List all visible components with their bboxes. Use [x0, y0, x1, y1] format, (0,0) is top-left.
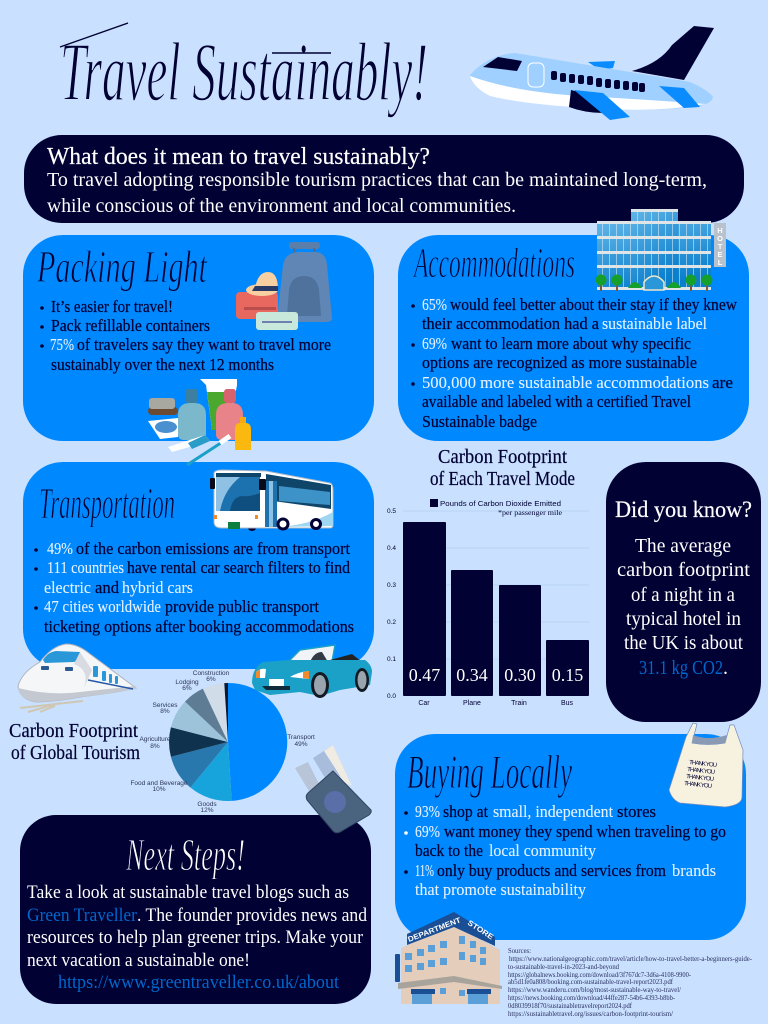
- pie labels: 10%: [152, 786, 166, 793]
- did you know fact: typical hotel in: [626, 608, 741, 630]
- sources: https://globalnews.booking.com/download/3f767dc7-3d6a-4108-9900-: [508, 970, 691, 979]
- pie labels: Transport: [287, 734, 315, 741]
- x axis labels: Car: [418, 700, 430, 707]
- bullet list: It’s easier for travel!: [51, 297, 173, 316]
- icon: shopping bag: THANK YOU: [686, 774, 714, 783]
- bullet list: Sustainable badge: [422, 412, 537, 431]
- bullet list: [40, 297, 331, 374]
- definition text: while conscious of the environment and local communities.: [47, 195, 516, 217]
- chart title: travel mode: [430, 447, 575, 490]
- bullet list: Pack refillable containers: [51, 316, 210, 335]
- definition text: [47, 169, 707, 217]
- slice: construction: [203, 683, 228, 742]
- bullet list: of travelers say they want to travel more: [77, 335, 331, 354]
- x axis labels: Train: [511, 700, 527, 707]
- pie labels: Agriculture: [139, 736, 171, 743]
- bullet list: small, independent: [493, 802, 613, 821]
- heading: accommodations: Accommodations: [412, 241, 575, 287]
- heading: next steps: Next Steps!: [125, 829, 245, 880]
- bullet list: 49%: [47, 539, 73, 558]
- bar chart: 0.5: [387, 508, 396, 515]
- icon: hotel: O: [717, 234, 723, 243]
- bullet list: only buy products and services from: [437, 861, 666, 880]
- definition text: To travel adopting responsible tourism practices that can be maintained long-term,: [47, 169, 707, 191]
- bullet list: shop at: [443, 802, 488, 821]
- bullet list: [411, 295, 738, 431]
- sources: to-sustainable-travel-in-2023-and-beyond: [508, 962, 619, 971]
- bullet list: 47 cities worldwide: [44, 597, 161, 616]
- did you know fact: of a night in a: [631, 584, 735, 606]
- bullet list: 111 countries: [47, 558, 124, 577]
- sources: https://www.wanderu.com/blog/most-sustainable-way-to-travel/: [508, 985, 682, 994]
- bullet list: would feel better about their stay if they knew: [450, 295, 738, 314]
- heading: packing light: Packing Light: [36, 241, 208, 292]
- bar: train: [499, 585, 541, 696]
- slice: transport: [228, 683, 287, 801]
- pie labels: Lodging: [175, 679, 199, 686]
- bullet list: of the carbon emissions are from transport: [76, 539, 350, 558]
- pie labels: 6%: [206, 676, 216, 683]
- bullet list: brands: [672, 861, 716, 880]
- bar chart: 0.4: [387, 545, 396, 552]
- did you know fact: The average: [635, 535, 731, 557]
- did you know heading: Did you know?: [615, 497, 752, 522]
- next steps text: [27, 882, 367, 971]
- icon: convertible car: [252, 645, 372, 698]
- bullet list: want money they spend when traveling to go: [444, 822, 726, 841]
- next steps text: resources to help plan greener trips. Make your: [27, 927, 364, 948]
- next steps text: Take a look at sustainable travel blogs such as: [27, 882, 349, 903]
- icon: bullet train: [18, 644, 136, 712]
- sources: https://sustainabletravel.org/issues/carbon-footprint-tourism/: [508, 1009, 674, 1018]
- bullet list: options are recognized as more sustainable: [422, 353, 697, 372]
- icon: luggage: [236, 242, 332, 330]
- bullet list: stores: [617, 802, 656, 821]
- chart title: global tourism: [9, 721, 140, 764]
- bar: bus: [546, 640, 589, 696]
- title: Travel Sustainably!: [60, 26, 428, 119]
- icon: toiletries: [148, 379, 251, 465]
- bar chart: 0.1: [387, 656, 396, 663]
- panel: packing light: [23, 235, 374, 441]
- did you know fact: the UK is about: [624, 632, 743, 654]
- did you know fact: .: [723, 657, 728, 679]
- x axis labels: [418, 700, 574, 707]
- legend: *per passenger mile: [498, 508, 563, 517]
- icon: hotel: T: [718, 242, 723, 251]
- title: [60, 23, 428, 119]
- slice: services: [171, 702, 228, 742]
- did you know fact: carbon footprint: [617, 559, 750, 581]
- chart title: global tourism: of Global Tourism: [11, 743, 140, 764]
- pie labels: 12%: [200, 807, 214, 814]
- slice: goods: [190, 742, 232, 801]
- bar: plane: 0.34: [456, 665, 488, 685]
- chart title: travel mode: Carbon Footprint: [438, 447, 568, 468]
- bar: car: 0.47: [409, 665, 440, 685]
- pie labels: 8%: [150, 743, 160, 750]
- bullet list: back to the: [415, 841, 483, 860]
- pie labels: 8%: [160, 708, 170, 715]
- chart title: travel mode: of Each Travel Mode: [430, 469, 575, 490]
- icon: hotel: L: [718, 258, 723, 267]
- bar: bus: 0.15: [552, 665, 583, 685]
- panel: next steps: [20, 815, 371, 1004]
- bar chart: [387, 499, 589, 707]
- sources: ab5d1fe0a808/booking.com-sustainable-travel-report2023.pdf: [508, 977, 673, 986]
- pie labels: Services: [153, 702, 178, 709]
- icon: bus: [210, 470, 333, 531]
- next steps text: Green Traveller: [27, 905, 138, 926]
- icon: department store: STORE: [466, 918, 495, 941]
- pie labels: Construction: [193, 670, 230, 677]
- pie labels: [130, 670, 315, 814]
- bullet list: provide public transport: [165, 597, 319, 616]
- chart title: global tourism: Carbon Footprint: [9, 721, 139, 742]
- panel: transportation: [23, 462, 374, 669]
- bullet list: [404, 802, 726, 899]
- x axis labels: Plane: [463, 700, 481, 707]
- slice: food and beverage: [171, 742, 228, 788]
- did you know fact: 31.1 kg CO2: [639, 657, 723, 679]
- bar: plane: [451, 570, 493, 696]
- panel: did you know: [606, 462, 761, 722]
- panel: what does it mean: [24, 135, 744, 223]
- panel: buying locally: [395, 734, 746, 940]
- bar chart: 0.0: [387, 693, 396, 700]
- panel: accommodations: [398, 209, 749, 441]
- bullet list: 69%: [415, 822, 440, 841]
- bullet list: hybrid cars: [122, 578, 193, 597]
- bar chart: 0.3: [387, 582, 396, 589]
- bullet list: 69%: [422, 334, 447, 353]
- heading: transportation: Transportation: [39, 479, 175, 528]
- bullet list: want to learn more about why specific: [451, 334, 691, 353]
- sources: Sources:: [508, 946, 531, 955]
- bullet list: sustainable label: [602, 314, 707, 333]
- bullet list: are: [712, 373, 733, 392]
- bullet list: 65%: [422, 295, 447, 314]
- bullet list: and: [95, 578, 119, 597]
- bar: train: 0.30: [504, 665, 536, 685]
- bullet list: 11%: [415, 861, 434, 880]
- next steps text: next vacation a sustainable one!: [27, 950, 250, 971]
- legend: Pounds of Carbon Dioxide Emitted: [440, 499, 561, 508]
- icon: hotel: E: [717, 250, 723, 259]
- icon: department store: [395, 912, 502, 1004]
- icon: shopping bag: [669, 723, 743, 807]
- sources: https://news.booking.com/download/44ffe287-54b6-4393-b8bb-: [508, 993, 675, 1002]
- did you know fact: [617, 535, 750, 679]
- icon: hotel: H: [717, 226, 723, 235]
- bullet list: 93%: [415, 802, 440, 821]
- bullet list: ticketing options after booking accommodations: [44, 617, 354, 636]
- next steps text: . The founder provides news and: [137, 905, 367, 926]
- sources: 0d8039918f70/sustainabletravelreport2024.pdf: [508, 1001, 632, 1010]
- question heading: What does it mean to travel sustainably?: [47, 144, 430, 170]
- pie labels: Goods: [197, 801, 217, 808]
- icon: airplane: [470, 26, 714, 120]
- bullet list: local community: [489, 841, 596, 860]
- bullet list: have rental car search filters to find: [127, 558, 350, 577]
- pie chart: [130, 670, 315, 814]
- pie labels: Food and Beverage: [130, 780, 188, 787]
- slice: lodging: [185, 689, 228, 742]
- sources: [508, 946, 752, 1018]
- bullet list: [34, 539, 354, 636]
- bar chart: 0.2: [387, 619, 396, 626]
- legend: [430, 499, 563, 517]
- bullet list: their accommodation had a: [422, 314, 599, 333]
- icon: department store: DEPARTMENT: [406, 915, 462, 944]
- bullet list: sustainably over the next 12 months: [51, 355, 274, 374]
- pie labels: 6%: [182, 685, 192, 692]
- bullet list: electric: [44, 578, 91, 597]
- slice: other: [224, 683, 228, 742]
- website link: https://www.greentraveller.co.uk/about: [58, 972, 340, 993]
- icon: shopping bag: THANK YOU: [689, 760, 717, 769]
- icon: shopping bag: THANK YOU: [684, 781, 712, 790]
- pie labels: 49%: [294, 741, 308, 748]
- icon: passport and tickets: [295, 745, 371, 833]
- bullet list: available and labeled with a certified Travel: [422, 392, 691, 411]
- bullet list: that promote sustainability: [415, 880, 586, 899]
- bar: car: [403, 522, 446, 696]
- icon: shopping bag: THANK YOU: [687, 767, 715, 776]
- x axis labels: Bus: [561, 700, 574, 707]
- heading: buying locally: Buying Locally: [407, 746, 572, 799]
- bullet list: 75%: [50, 335, 74, 354]
- icon: hotel: [596, 209, 726, 291]
- slice: agriculture: [169, 727, 228, 757]
- bullet list: 500,000 more sustainable accommodations: [422, 373, 709, 392]
